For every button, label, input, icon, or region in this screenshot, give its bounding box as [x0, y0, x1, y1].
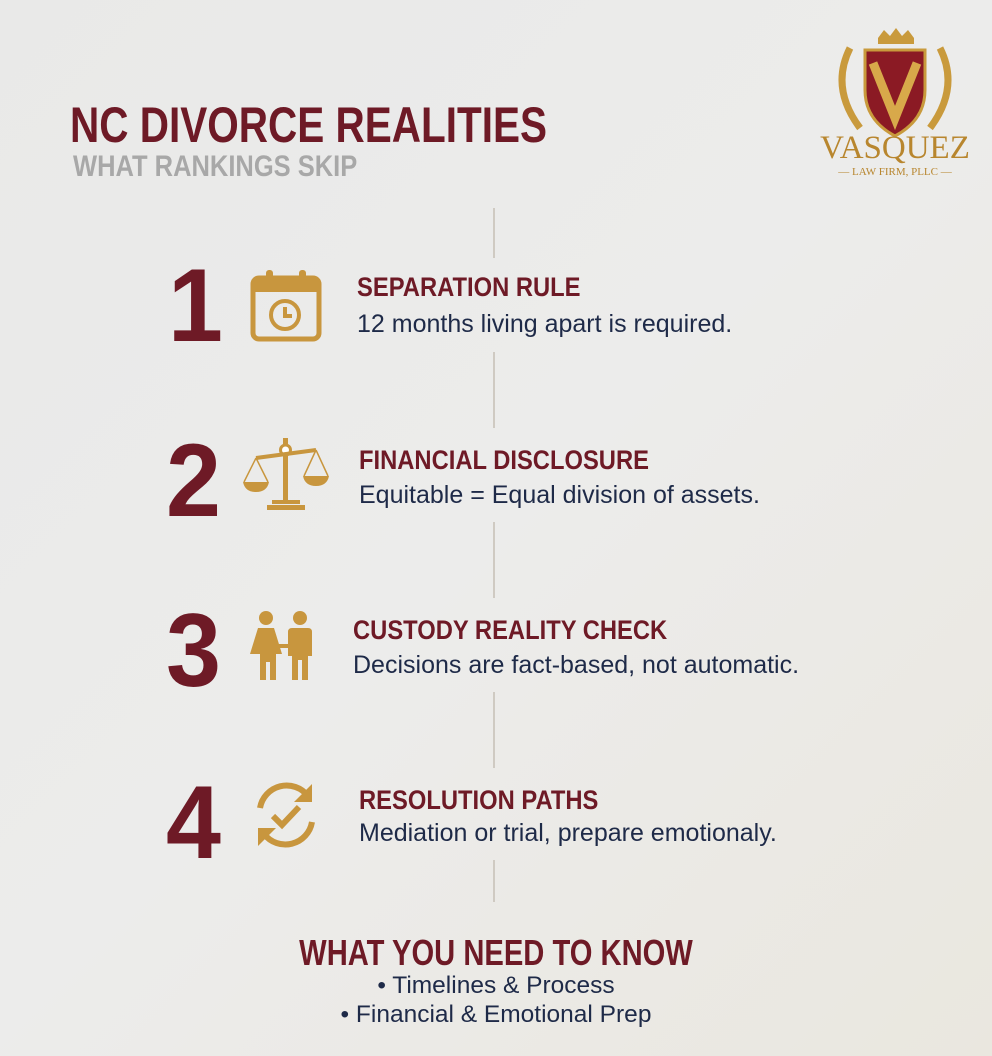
item 4: RESOLUTION PATHS [359, 785, 598, 815]
timeline line [493, 208, 495, 902]
item 1 [168, 248, 732, 364]
logo: VASQUEZ [820, 130, 970, 166]
icon: people [250, 611, 312, 680]
bottom bullets: • Timelines & Process [377, 972, 615, 999]
item 2: Equitable = Equal division of assets. [359, 481, 760, 509]
icon: scales [243, 438, 329, 510]
logo: — LAW FIRM, PLLC — [837, 166, 953, 178]
item 1: SEPARATION RULE [357, 272, 581, 302]
title: NC DIVORCE REALITIES [70, 97, 547, 153]
logo [820, 28, 970, 178]
bottom bullets [341, 972, 651, 1028]
icon: calendar [250, 270, 322, 342]
item 1: 12 months living apart is required. [357, 310, 732, 338]
item 2 [166, 423, 760, 539]
item 2: FINANCIAL DISCLOSURE [359, 445, 649, 475]
item 1: 1 [168, 248, 223, 364]
item 4: Mediation or trial, prepare emotionaly. [359, 819, 777, 847]
item 4: 4 [166, 765, 221, 881]
item 3: 3 [166, 593, 221, 709]
subtitle: WHAT RANKINGS SKIP [73, 150, 357, 183]
bottom bullets: • Financial & Emotional Prep [341, 1001, 651, 1028]
item 2: 2 [166, 423, 221, 539]
item 3: CUSTODY REALITY CHECK [353, 615, 667, 645]
icon: cycle check [257, 782, 315, 848]
item 4 [166, 765, 777, 881]
item 3 [166, 593, 799, 709]
item 3: Decisions are fact-based, not automatic. [353, 651, 799, 679]
bottom heading: WHAT YOU NEED TO KNOW [299, 932, 693, 973]
